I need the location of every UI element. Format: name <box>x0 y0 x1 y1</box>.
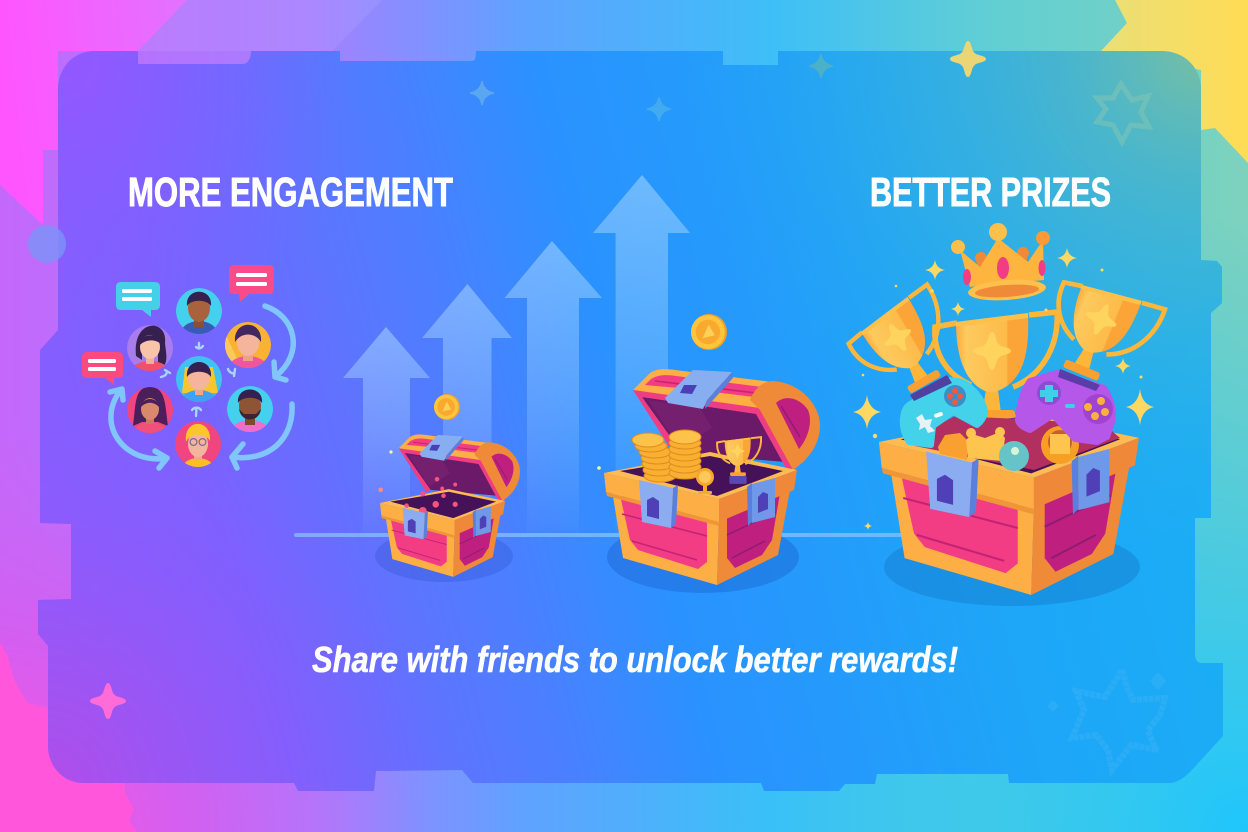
engagement network <box>82 265 293 480</box>
heading: more engagement: MORE ENGAGEMENT <box>128 169 453 215</box>
gems <box>378 477 458 515</box>
light tab shapes along top <box>138 0 382 51</box>
floating coin: small <box>434 394 460 420</box>
trophy: centre <box>935 312 1057 420</box>
crown <box>951 223 1050 303</box>
decorative sparkles <box>90 41 986 719</box>
tagline: Share with friends to unlock better rewards! <box>312 639 958 680</box>
game controller: purple <box>1018 369 1113 442</box>
medium treasure chest <box>604 369 820 585</box>
floating coin: medium <box>691 314 727 350</box>
curved arrows <box>110 306 293 468</box>
avatar: right <box>225 322 271 368</box>
avatar: lower right <box>227 386 273 432</box>
avatar: top <box>176 288 222 334</box>
avatar: bottom <box>175 421 221 467</box>
chat bubble: teal <box>116 282 160 317</box>
avatar: left <box>127 325 173 371</box>
small medal <box>696 468 714 494</box>
interior treasures <box>938 426 1079 471</box>
gold trophy inside <box>717 437 761 484</box>
trophy: right <box>1034 270 1165 395</box>
chat bubble: pink left <box>82 352 123 385</box>
game controller: teal <box>903 375 985 445</box>
chat bubble: pink top <box>229 265 274 302</box>
top-left pink corner shape <box>0 0 187 225</box>
coin stack right <box>669 430 701 479</box>
glints by medium chest <box>597 466 601 470</box>
decorative star outline top right <box>1097 84 1149 142</box>
large chest shadow <box>884 528 1140 606</box>
glints by small chest <box>389 450 393 454</box>
plinth <box>976 417 1030 436</box>
bottom-left pink blob <box>0 643 137 832</box>
large treasure chest <box>842 270 1165 595</box>
decorative circle <box>28 225 66 263</box>
small treasure chest <box>378 434 520 577</box>
avatar: lower left <box>127 387 173 433</box>
small chest shadow <box>375 530 513 582</box>
trophy: left <box>842 284 970 408</box>
baseline <box>294 533 906 537</box>
decorative pixel star bottom right <box>1047 670 1166 770</box>
growth arrows chart <box>343 175 690 535</box>
interior wall <box>915 416 1120 470</box>
heading: better prizes: BETTER PRIZES <box>870 169 1111 215</box>
small centre arrows <box>161 343 235 416</box>
coin stack left <box>632 433 676 482</box>
sparkles around prizes <box>853 248 1154 530</box>
avatar: centre <box>176 356 222 402</box>
top-right yellow corner shape <box>1101 0 1248 163</box>
medium chest shadow <box>607 521 799 593</box>
